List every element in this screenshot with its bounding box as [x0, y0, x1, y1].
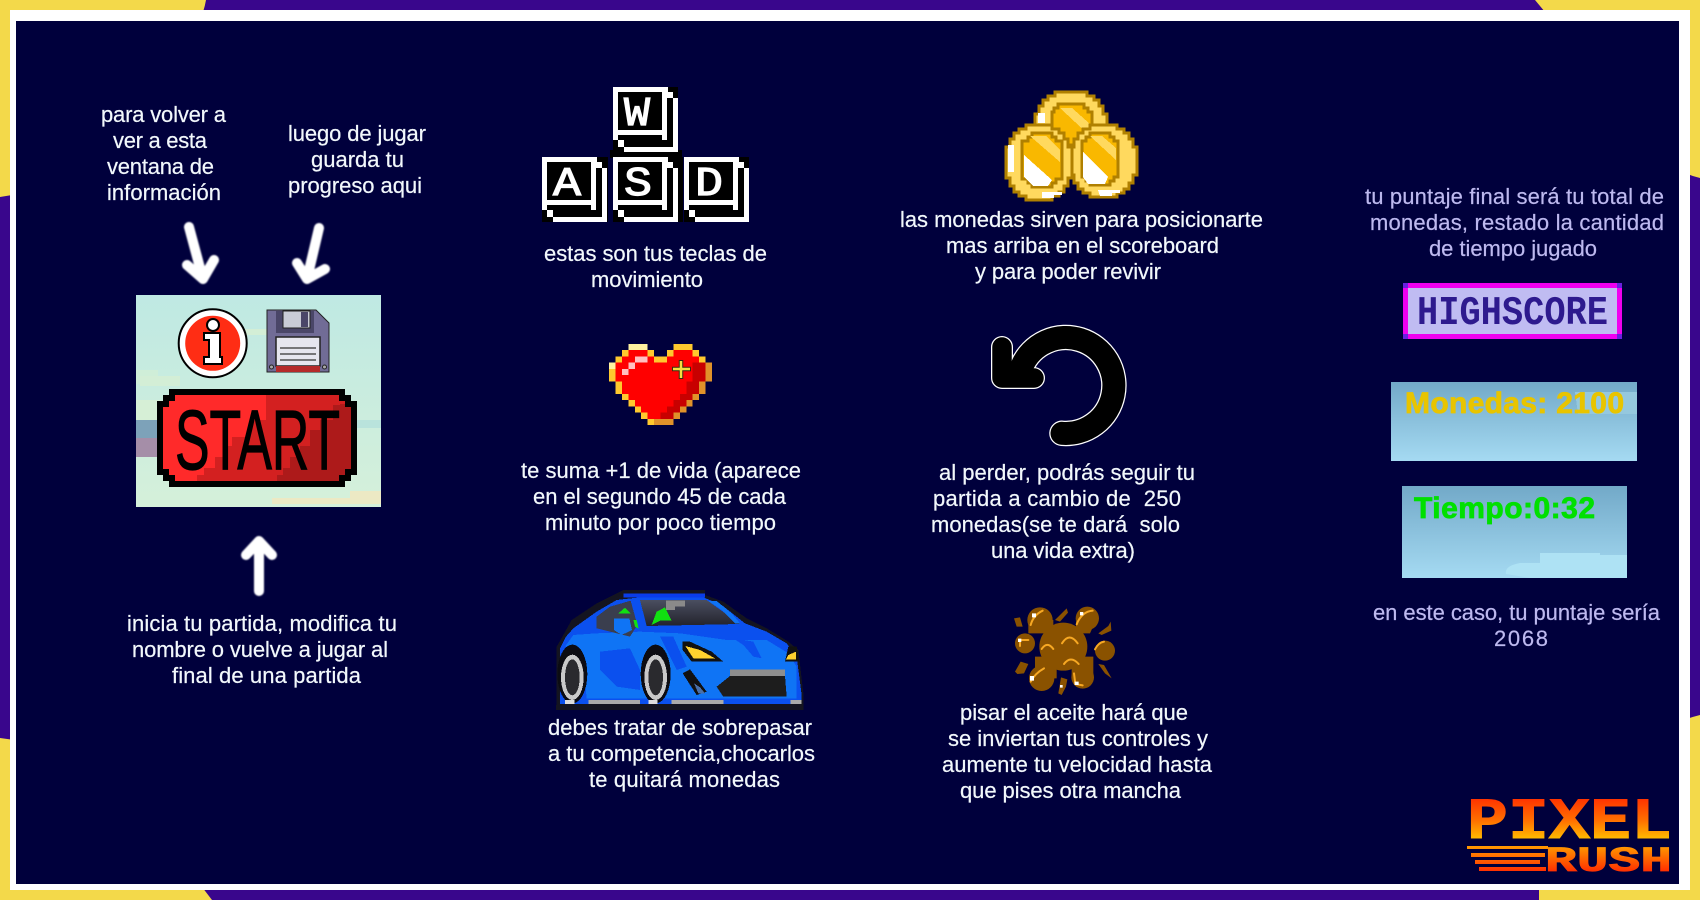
lights and grille — [683, 642, 723, 662]
text: monedas: las monedas sirven para posicionarte — [900, 207, 1263, 232]
text: perder: una vida extra) — [991, 538, 1135, 563]
text: para volver: ver a esta — [113, 128, 208, 153]
logo: Pixel Rush: RUSH — [1545, 842, 1672, 882]
text: aceite: se inviertan tus controles y — [948, 726, 1208, 751]
text: ejemplo puntaje: 2068 — [1494, 626, 1548, 651]
text: para volver — [101, 102, 227, 205]
wheels — [557, 645, 587, 703]
text: perder: monedas(se te dará solo — [931, 512, 1180, 537]
text: teclas: movimiento — [591, 267, 703, 292]
text: ejemplo puntaje — [1373, 600, 1661, 651]
arrow to start button — [246, 541, 272, 591]
text: monedas — [900, 207, 1263, 284]
text: para volver: ventana de — [107, 154, 214, 179]
key S — [613, 157, 683, 222]
text: puntaje final: de tiempo jugado — [1429, 236, 1597, 261]
time counter: Tiempo:0:32 — [1414, 492, 1595, 525]
start button — [157, 389, 357, 487]
text: inicia partida: inicia tu partida, modifica tu — [127, 611, 397, 636]
icon: info — [179, 309, 247, 377]
text: competencia — [548, 715, 815, 792]
text: inicia partida — [127, 611, 397, 688]
icon: coins — [1006, 92, 1137, 200]
text: vida — [521, 458, 801, 535]
coins counter — [1391, 382, 1637, 461]
plus sign — [672, 360, 691, 379]
key A: A — [553, 162, 581, 208]
time counter — [1402, 486, 1627, 578]
text: monedas: y para poder revivir — [975, 259, 1161, 284]
button label: START — [175, 393, 340, 487]
text: puntaje final: tu puntaje final será tu total de — [1365, 184, 1664, 209]
text: vida: en el segundo 45 de cada — [533, 484, 787, 509]
text: perder: al perder, podrás seguir tu — [939, 460, 1195, 485]
text: monedas: mas arriba en el scoreboard — [946, 233, 1219, 258]
text: teclas: estas son tus teclas de — [544, 241, 767, 266]
text: vida: minuto por poco tiempo — [545, 510, 776, 535]
arrow to save icon — [297, 228, 325, 279]
right coin — [1070, 125, 1137, 197]
text: perder: partida a cambio de 250 — [933, 486, 1181, 511]
text: aceite: aumente tu velocidad hasta — [942, 752, 1213, 777]
start screen panel — [136, 295, 381, 507]
text: para volver: para volver a — [101, 102, 227, 127]
text: inicia partida: nombre o vuelve a jugar al — [132, 637, 388, 662]
highscore badge: HIGHSCORE — [1417, 291, 1608, 337]
text: aceite — [942, 700, 1213, 803]
text: vida: te suma +1 de vida (aparece — [521, 458, 801, 483]
text: competencia: te quitará monedas — [589, 767, 780, 792]
key D — [684, 157, 749, 222]
arrow to info icon — [187, 227, 214, 279]
text: puntaje final — [1365, 184, 1664, 261]
text: ejemplo puntaje: en este caso, tu puntaje sería — [1373, 600, 1661, 625]
text: guarda progreso: guarda tu — [311, 147, 404, 172]
left coin — [1006, 125, 1072, 200]
icon: WASD keys — [542, 87, 749, 222]
text: puntaje final: monedas, restado la cantidad — [1370, 210, 1664, 235]
icon: blue car — [556, 590, 803, 710]
icon: oil stain — [1014, 607, 1115, 695]
key D: D — [695, 162, 723, 208]
key W: W — [624, 92, 650, 138]
text: aceite: pisar el aceite hará que — [960, 700, 1188, 725]
icon: undo arrow — [1002, 337, 1114, 433]
text: competencia: a tu competencia,chocarlos — [548, 741, 815, 766]
logo: Pixel Rush — [1467, 791, 1672, 882]
text: guarda progreso — [288, 121, 426, 198]
text: guarda progreso: progreso aqui — [288, 173, 422, 198]
logo: Pixel Rush: PIXEL — [1467, 791, 1672, 856]
text: perder — [931, 460, 1195, 563]
key S: S — [624, 162, 652, 208]
top coin — [1035, 92, 1107, 160]
key A — [542, 157, 608, 222]
icon: heart — [609, 344, 712, 425]
icon: floppy disk — [267, 310, 329, 372]
text: inicia partida: final de una partida — [172, 663, 362, 688]
text: teclas — [544, 241, 767, 292]
text: para volver: información — [107, 180, 221, 205]
coins counter: Monedas: 2100 — [1405, 387, 1624, 420]
text: guarda progreso: luego de jugar — [288, 121, 426, 146]
key W — [613, 87, 678, 152]
text: competencia: debes tratar de sobrepasar — [548, 715, 812, 740]
text: aceite: que pises otra mancha — [960, 778, 1182, 803]
